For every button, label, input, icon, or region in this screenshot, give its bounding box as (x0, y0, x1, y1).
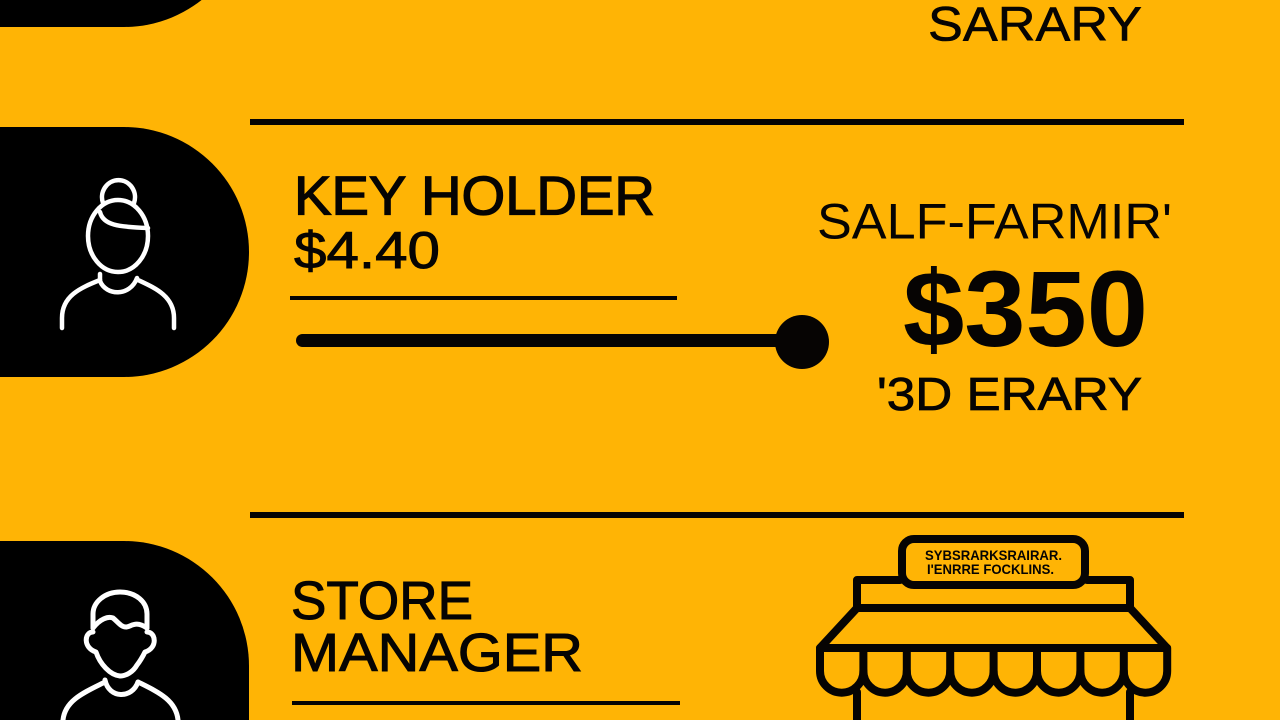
text: store sign (925, 547, 1062, 577)
heading: store manager: STORE (291, 571, 473, 631)
text: store sign: SYBSRARKSRAIRAR. (925, 547, 1062, 563)
panel: key holder row (0, 127, 1172, 420)
text: $350 amount: $350 (903, 248, 1148, 369)
divider: store manager underline (292, 701, 680, 705)
heading: store manager (291, 571, 583, 683)
icon: storefront with awning (820, 539, 1167, 720)
divider: lower section rule (250, 512, 1184, 518)
panel: store manager tab (0, 541, 249, 720)
divider: upper section rule (250, 119, 1184, 125)
panel: store manager row (0, 539, 1167, 720)
panel: key holder tab (0, 127, 249, 377)
text: self-farmer label: SALF-FARMIR' (817, 194, 1172, 250)
heading: key holder: KEY HOLDER (294, 164, 655, 226)
text: salary caption: '3D ERARY (877, 368, 1142, 420)
divider: key holder underline (290, 296, 677, 300)
text: top salary label: SARARY (928, 0, 1142, 52)
heading: store manager: MANAGER (291, 623, 583, 683)
icon: woman with hair bun (62, 180, 174, 328)
panel: top role tab (cropped) (0, 0, 249, 27)
text: store sign: I'ENRRE FOCKLINS. (927, 561, 1054, 577)
text: key holder wage: $4.40 (294, 222, 440, 280)
icon: man with cap (63, 592, 178, 720)
chart: wage slider with end dot (296, 315, 829, 369)
